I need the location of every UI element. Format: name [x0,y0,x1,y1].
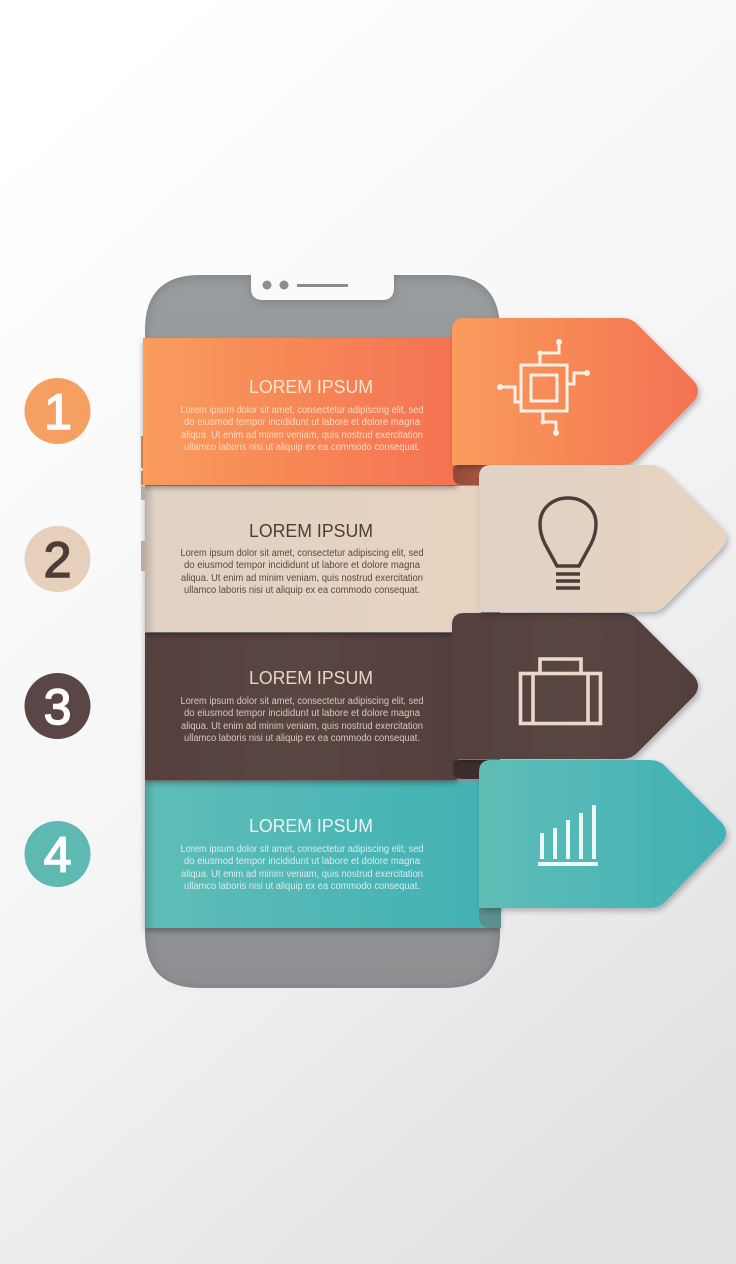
tag 2: beige arrow with bulb icon [479,465,726,612]
tag 1: orange arrow with chip icon [452,318,698,465]
body text 4: ullamco laboris nisi ut aliquip ex ea commodo consequat. [184,881,420,892]
tag 3: brown arrow with briefcase icon [452,613,698,759]
number badge 1: 1 [44,384,72,440]
body text 2: do eiusmod tempor incididunt ut labore et dolore magna [184,560,420,571]
body text 3: Lorem ipsum dolor sit amet, consectetur adipiscing elit, sed [180,696,424,707]
phone side buttons [141,436,145,485]
tag 4: teal arrow with bar chart icon [479,760,726,908]
body text 2: aliqua. Ut enim ad minim veniam, quis nostrud exercitation [181,573,423,584]
body text 2 [180,548,424,596]
phone speaker [297,284,348,287]
side button notch on beige [141,486,145,571]
body text 1: do eiusmod tempor incididunt ut labore et dolore magna [184,417,420,428]
number badge 4: 4 [44,827,71,883]
number badge 3 [24,673,90,739]
phone body [145,275,500,988]
fold: orange tag [453,465,490,485]
panel 1: orange band [143,338,457,485]
number badge 2 [24,526,90,592]
body text 2: Lorem ipsum dolor sit amet, consectetur adipiscing elit, sed [180,548,424,559]
number badge 4 [24,821,90,887]
icon: circuit chip [497,339,590,436]
number badge 1 [24,378,90,444]
body text 1: aliqua. Ut enim ad minim veniam, quis nostrud exercitation [181,430,423,441]
body text 4 [180,844,424,892]
icon: briefcase [520,659,600,724]
heading 4: LOREM IPSUM [249,815,373,836]
panel 4: teal band [145,781,500,928]
body text 4: aliqua. Ut enim ad minim veniam, quis nostrud exercitation [181,869,423,880]
body text 3 [180,696,424,744]
body text 4: do eiusmod tempor incididunt ut labore et dolore magna [184,856,420,867]
body text 1: Lorem ipsum dolor sit amet, consectetur adipiscing elit, sed [180,405,424,416]
body text 3: aliqua. Ut enim ad minim veniam, quis nostrud exercitation [181,721,423,732]
number badge 2: 2 [44,532,71,588]
heading 3: LOREM IPSUM [249,667,373,688]
number badge 3: 3 [44,679,71,735]
body text 3: ullamco laboris nisi ut aliquip ex ea commodo consequat. [184,733,420,744]
body text 2: ullamco laboris nisi ut aliquip ex ea commodo consequat. [184,585,420,596]
panel 3: brown band [145,633,457,780]
fold: teal tag [479,908,501,928]
phone camera dots [262,280,288,290]
heading 2: LOREM IPSUM [249,520,373,541]
icon: light bulb [540,498,596,588]
body text 4: Lorem ipsum dolor sit amet, consectetur adipiscing elit, sed [180,844,424,855]
body text 1 [180,405,424,453]
heading 1: LOREM IPSUM [249,376,373,397]
body text 3: do eiusmod tempor incididunt ut labore et dolore magna [184,708,420,719]
panel 2: beige band [145,486,481,632]
body text 1: ullamco laboris nisi ut aliquip ex ea commodo consequat. [184,442,420,453]
icon: bar chart [538,805,598,866]
fold: brown tag [453,760,490,779]
